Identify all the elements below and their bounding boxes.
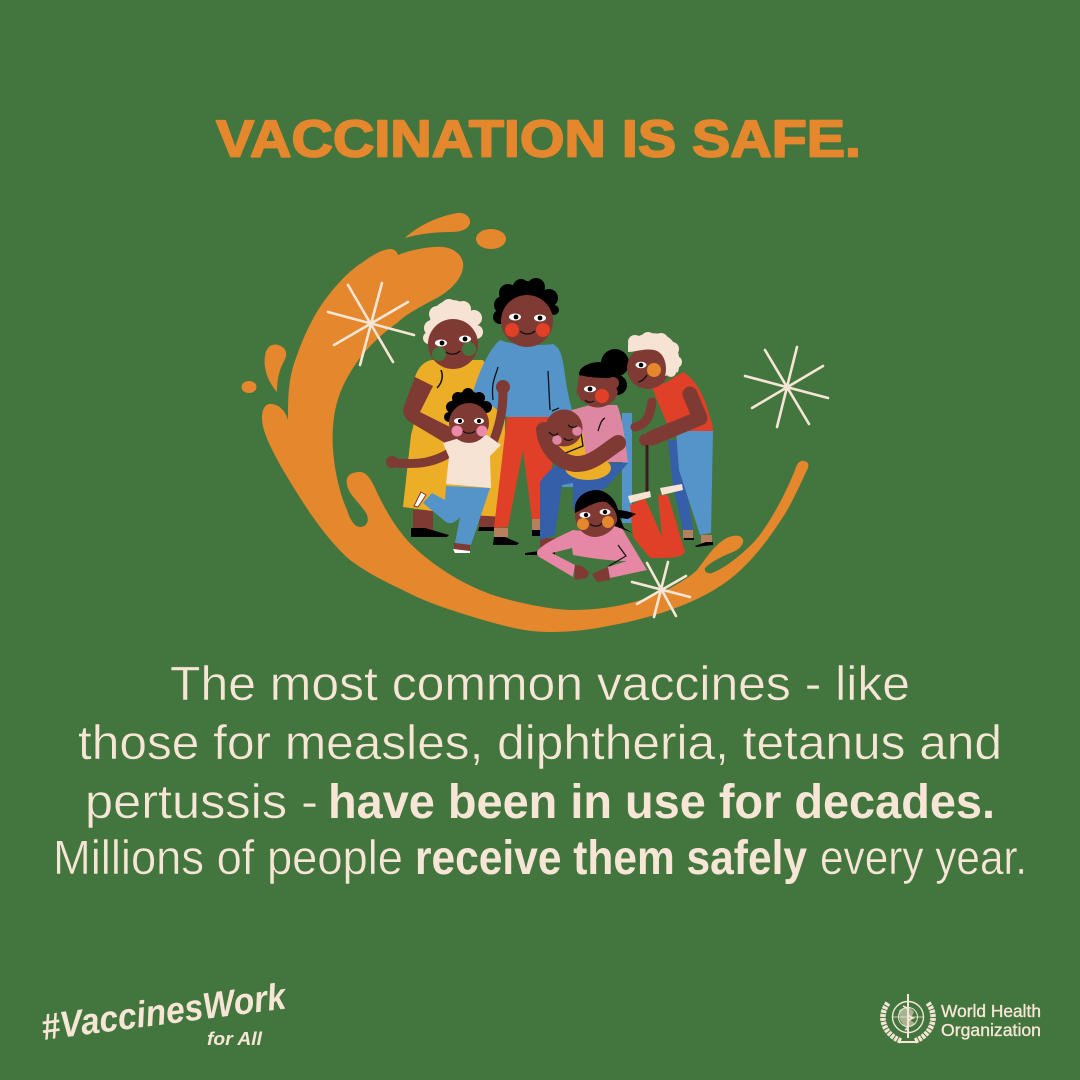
seated mother with baby bbox=[525, 349, 629, 555]
girl lying on the floor bbox=[537, 484, 685, 582]
hair bbox=[628, 332, 682, 377]
body text: receive them safely bbox=[415, 832, 807, 885]
hair and head bbox=[601, 349, 629, 377]
emblem bbox=[883, 994, 933, 1042]
body text bbox=[53, 658, 1027, 885]
man in blue bbox=[473, 278, 573, 545]
sparkle right bbox=[745, 347, 828, 427]
body text: The most common vaccines - like bbox=[170, 658, 910, 711]
sparkle bottom bbox=[632, 562, 690, 617]
body text: Millions of people bbox=[53, 832, 403, 885]
organisation name: Organization bbox=[941, 1020, 1041, 1040]
WHO logo bbox=[883, 994, 1041, 1042]
child with raised hand bbox=[386, 380, 510, 553]
grandmother on left bbox=[403, 299, 505, 537]
hair bbox=[423, 299, 483, 344]
body text: have been in use for decades. bbox=[328, 776, 995, 829]
organisation name bbox=[941, 1001, 1041, 1040]
organisation name: World Health bbox=[941, 1001, 1041, 1021]
sparkle left bbox=[328, 283, 414, 365]
chair bbox=[562, 413, 632, 523]
hair bbox=[444, 388, 492, 427]
grandmother with cane bbox=[627, 332, 713, 547]
body text: those for measles, diphtheria, tetanus and bbox=[78, 717, 1002, 770]
body text: pertussis - bbox=[85, 776, 318, 829]
title: VACCINATION IS SAFE. bbox=[216, 110, 861, 168]
hair bbox=[493, 278, 559, 329]
orange splash swirl bbox=[262, 247, 808, 632]
splash droplets bbox=[242, 213, 506, 393]
campaign hashtag: #VaccinesWork bbox=[39, 975, 290, 1048]
illustration: family in orange splash bbox=[242, 213, 828, 632]
body text: every year. bbox=[820, 832, 1027, 885]
campaign hashtag: for All bbox=[207, 1029, 263, 1049]
